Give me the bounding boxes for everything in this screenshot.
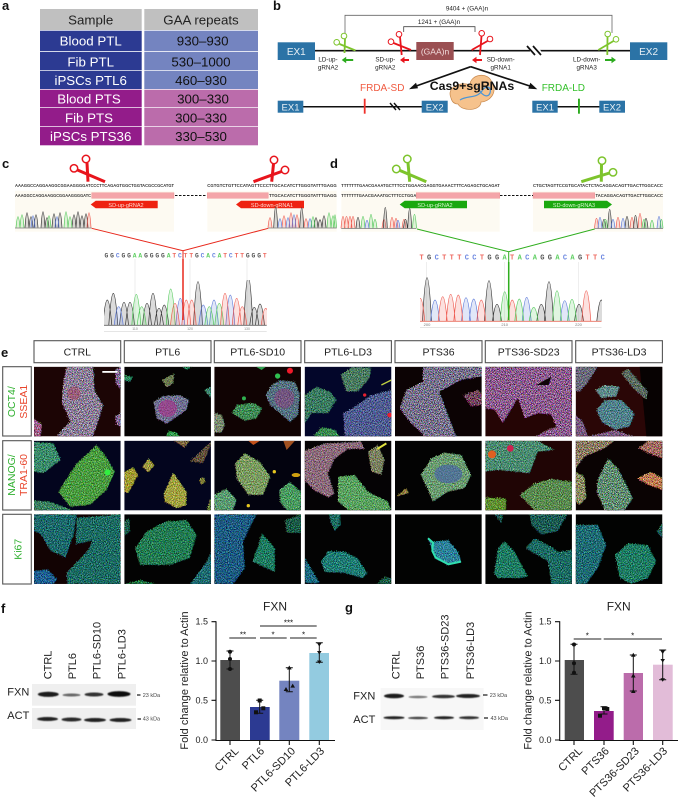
blot lane labels: CTRL: [391, 651, 403, 679]
right trace strip: [207, 183, 337, 232]
left trace strip: AAAGGCCAGGAAGGCGGAAGGGGATC: [15, 193, 91, 198]
exon 1 box: [278, 42, 315, 60]
FXN blot bands: [384, 694, 480, 698]
micrograph PTL6-SD10 NANOG: [214, 441, 301, 510]
column headers: CTRL: [64, 346, 91, 358]
exon 1 box: EX1: [287, 47, 306, 58]
x tick labels: PTS36-LD3: [621, 745, 670, 794]
panel letter d: d: [330, 156, 338, 171]
x tick labels: CTRL: [213, 745, 241, 774]
micrograph PTL6-LD3 Ki67: [305, 514, 391, 584]
row iPSCs PTS36: iPSCs PTS36: [50, 129, 131, 144]
Cas9+sgRNAs label: Cas9+sgRNAs: [430, 79, 514, 93]
left trace strip: TTTTTTTGAACGAAATGCTTTCCTGGAACGAGGTGAAACTTTCAGAGCTGCAGAT: [341, 183, 500, 188]
outer bracket 9404: 9404 + (GAA)n: [446, 6, 489, 12]
base calls: TGCTTTCCTGGATACAGGACAGTTC: [420, 254, 608, 262]
micrograph CTRL NANOG: [34, 441, 121, 510]
left trace strip: SD-up-gRNA2: [108, 203, 144, 209]
significance bars: [229, 618, 317, 640]
row iPSCs PTL6: [40, 71, 258, 89]
panel letter e: e: [1, 345, 8, 360]
panel e: immunofluorescence grid: [1, 341, 662, 584]
deletion dashed link: [500, 194, 533, 196]
blot lane labels: [43, 622, 129, 679]
gRNA label LD-up: gRNA2: [318, 64, 339, 72]
row label OCT4/SSEA1: OCT4/: [6, 386, 18, 417]
row Blood PTL: [40, 31, 258, 51]
micrograph PTL6-LD3 NANOG: [305, 441, 391, 510]
row label NANOG/TRA1-60: NANOG/: [6, 454, 18, 496]
FRDA-LD allele: EX2: [603, 102, 621, 113]
gRNA label SD-down: gRNA1: [491, 64, 511, 72]
blot labels: [353, 690, 376, 726]
inner bracket 1241: [404, 19, 475, 32]
junction trace: 110: [132, 327, 138, 331]
guide arrow SD-up: [400, 57, 409, 63]
significance bars: *: [586, 632, 589, 640]
inner bracket 1241: 1241 + (GAA)n: [418, 19, 461, 26]
size markers: [137, 693, 161, 722]
y tick labels: 1.0: [195, 656, 208, 666]
blot labels: ACT: [7, 710, 30, 722]
row Fib PTS: [40, 108, 258, 126]
blot labels: [7, 687, 30, 722]
scissors right green: [581, 157, 617, 182]
micrograph PTS36 NANOG: [395, 441, 482, 510]
right trace strip: SD-down-gRNA1: [251, 203, 293, 209]
y axis title: Fold change relative to Actin: [179, 611, 191, 750]
column headers: PTS36: [422, 346, 455, 358]
junction trace: [103, 252, 270, 332]
row label NANOG/TRA1-60: [3, 441, 31, 510]
column headers: PTL6-LD3: [324, 346, 372, 358]
left trace strip: SD-up-gRNA2: [417, 203, 453, 209]
size markers: 23 kDa: [490, 693, 508, 699]
micrograph PTS36 OCT4: [395, 367, 482, 436]
FRDA-SD allele: [278, 99, 448, 114]
panel letter g: g: [345, 600, 353, 615]
FRDA-LD allele: [532, 99, 625, 114]
y tick labels: [539, 617, 552, 745]
row Fib PTL: Fib PTL: [67, 55, 114, 70]
scissors: SD-up red: [388, 32, 411, 55]
scale bar: [102, 371, 117, 373]
micrograph PTS36-SD23 NANOG: [485, 441, 572, 510]
scissors right red: [254, 156, 289, 182]
left trace strip: AAAGGCCAGGAAGGCGGAAGGGGATCCCTTCAGAGTGGCTGGTACGCCGCATGT: [15, 183, 174, 188]
scissors left red: [70, 155, 105, 182]
right trace strip: SD-down-gRNA3: [553, 203, 595, 209]
row iPSCs PTS36: [40, 127, 258, 145]
blot labels: ACT: [353, 714, 376, 726]
significance bars: *: [302, 630, 305, 640]
panel f: PTL6 western blot and bar chart: [1, 600, 335, 794]
Cas9 protein blob: [450, 75, 494, 109]
size markers: 23 kDa: [143, 693, 161, 699]
ACT blot strip: [32, 708, 136, 729]
gRNA label LD-down: gRNA3: [577, 64, 597, 72]
y tick labels: 0.0: [195, 735, 208, 745]
row iPSCs PTL6: 460–930: [175, 73, 227, 88]
data points: [572, 642, 665, 718]
right trace strip: TTGCACATCTTGGGTATTTGAGG: [269, 193, 337, 198]
y tick labels: 0.0: [539, 735, 552, 745]
panel letter c: c: [2, 156, 9, 171]
ACT blot bands: [384, 716, 479, 719]
blot lane labels: [391, 614, 477, 679]
row Fib PTS: 300–330: [175, 110, 227, 125]
scissors: LD-down green: [598, 31, 619, 55]
table header row: [40, 9, 258, 30]
significance bars: ***: [284, 618, 293, 628]
y axis title: Fold change relative to Actin: [522, 611, 534, 750]
panel a: GAA repeats table: [2, 0, 258, 145]
red junction lines: [92, 228, 268, 320]
left trace strip: [15, 183, 174, 232]
right trace strip: CGTGTCTGTTCCATAGTTCCCTTGCACATCTTGGGTATTTGAGG: [207, 183, 337, 188]
panel letter f: f: [1, 601, 6, 616]
y tick labels: 0.5: [195, 695, 208, 705]
FRDA-SD allele: EX1: [282, 102, 299, 113]
FRDA-SD label: FRDA-SD: [360, 83, 404, 94]
size markers: 43 kDa: [143, 716, 161, 722]
junction trace: 200: [424, 322, 431, 327]
row iPSCs PTS36: 330–530: [175, 129, 227, 144]
junction trace: 220: [575, 322, 583, 327]
scissors: SD-down red: [472, 30, 493, 55]
exon 2 box: EX2: [639, 47, 658, 58]
micrograph PTS36-LD3 OCT4: [576, 367, 662, 436]
significance bars: [574, 632, 662, 640]
micrograph PTL6-SD10 OCT4: [214, 367, 301, 436]
scissors: LD-up green: [334, 33, 356, 53]
column headers: PTL6: [155, 346, 180, 358]
junction trace: [416, 254, 608, 328]
x tick labels: PTS36: [580, 745, 612, 778]
micrograph PTS36-LD3 Ki67: [576, 514, 662, 584]
genomic line: [315, 50, 630, 52]
table header row: Sample: [68, 12, 113, 28]
micrograph PTL6-SD10 Ki67: [214, 514, 301, 584]
row Blood PTL: Blood PTL: [60, 34, 122, 49]
outer bracket 9404: [345, 6, 612, 33]
row Blood PTS: Blood PTS: [57, 91, 121, 106]
gRNA label SD-down: SD-down-: [487, 56, 515, 64]
micrograph PTL6-LD3 OCT4: [305, 367, 392, 436]
FXN chart title: FXN: [607, 600, 631, 614]
x tick labels: PTL6-SD10: [249, 745, 298, 794]
blot labels: FXN: [353, 690, 375, 702]
FRDA-SD allele: EX2: [426, 102, 444, 113]
data points: [228, 643, 322, 714]
junction trace: 120: [187, 327, 193, 331]
scissors left green: [393, 155, 426, 182]
right trace strip: TACAGGACAGTTGACTTGGCACC: [596, 193, 663, 198]
blot lane labels: PTS36-LD3: [465, 622, 477, 679]
blot lane labels: PTS36: [415, 646, 427, 679]
y tick labels: 1.0: [539, 656, 552, 666]
column headers: PTS36-LD3: [592, 346, 647, 358]
error bars: [226, 643, 323, 713]
blot lane labels: PTL6-SD10: [92, 622, 104, 679]
right trace strip: [533, 183, 663, 232]
x tick labels: [213, 745, 327, 794]
bars: [220, 653, 329, 740]
right trace strip: CTGCTAGTTCCGTGCATACTCTACAGGACAGTTGACTTGGCACC: [533, 183, 663, 188]
base calls: GGCGGAAGGGGATCTTGCACATCTTGGGT: [104, 252, 268, 260]
micrograph PTS36 Ki67: [395, 514, 482, 584]
panel g: PTS36 western blot and bar chart: [345, 600, 678, 799]
x tick labels: PTL6: [240, 745, 267, 772]
FXN chart title: FXN: [263, 600, 287, 614]
axes and ticks: [555, 621, 678, 745]
exon 2 box: [630, 42, 667, 60]
panel d: Sanger trace for LD deletion: [330, 155, 663, 328]
GAA repeat box: (GAA)n: [421, 46, 449, 56]
size markers: 43 kDa: [490, 716, 509, 722]
significance bars: *: [631, 632, 634, 640]
blot lane labels: PTL6: [67, 653, 79, 679]
row label OCT4/SSEA1: [3, 367, 31, 436]
blot background: [381, 688, 484, 730]
significance bars: **: [240, 630, 246, 640]
x tick labels: [556, 745, 670, 799]
row Blood PTS: 300–330: [177, 91, 229, 106]
micrograph CTRL Ki67: [34, 514, 121, 584]
micrograph PTL6 Ki67: [124, 514, 211, 584]
bars: [565, 660, 673, 740]
blot labels: FXN: [7, 687, 29, 699]
error bars: [570, 644, 666, 714]
deletion dashed link: [175, 194, 207, 196]
x tick labels: CTRL: [556, 745, 585, 774]
branching arrows: [409, 67, 537, 89]
blot lane labels: CTRL: [43, 651, 55, 679]
y tick labels: [195, 617, 208, 745]
x tick labels: PTL6-LD3: [283, 745, 327, 789]
guide arrow SD-down: [472, 57, 482, 63]
row Blood PTS: [40, 90, 258, 107]
FRDA-LD label: FRDA-LD: [542, 83, 585, 94]
table header row: GAA repeats: [163, 12, 239, 28]
row Blood PTL: 930–930: [177, 34, 229, 49]
gRNA label SD-up: SD-up-: [375, 56, 395, 64]
guide arrow LD-up: [342, 57, 353, 63]
FXN blot strip: [32, 684, 136, 706]
column headers: PTS36-SD23: [498, 346, 560, 358]
y tick labels: 1.5: [195, 617, 208, 627]
row label Ki67: [3, 514, 31, 584]
row iPSCs PTL6: iPSCs PTL6: [54, 73, 127, 88]
left trace strip: [341, 183, 500, 232]
blot lane labels: PTS36-SD23: [440, 614, 452, 679]
column headers: PTL6-SD10: [230, 346, 285, 358]
panel b: deletion strategy schematic: [273, 0, 667, 114]
axes and ticks: [212, 621, 335, 745]
junction trace: 210: [501, 322, 509, 327]
junction trace: 130: [244, 327, 250, 331]
micrograph PTS36-LD3 NANOG: [576, 441, 662, 510]
micrograph PTL6 OCT4: [124, 367, 211, 436]
panel c: Sanger trace for SD deletion: [2, 155, 337, 332]
micrograph CTRL OCT4: [34, 367, 121, 436]
gRNA label LD-up: LD-up-: [318, 56, 338, 64]
y tick labels: 0.5: [539, 695, 552, 705]
left trace strip: TTTTTTTGAACGAAATGCTTTCCTGGA: [341, 193, 416, 198]
green junction lines: [417, 229, 595, 320]
row label OCT4/SSEA1: SSEA1: [18, 385, 30, 419]
micrograph PTS36-SD23 Ki67: [485, 514, 572, 584]
y tick labels: 1.5: [539, 617, 552, 627]
column headers: [34, 341, 662, 363]
line break mark: [527, 46, 541, 55]
x tick labels: PTS36-SD23: [588, 745, 642, 799]
gRNA label LD-down: LD-down-: [573, 56, 600, 64]
GAA repeat box: [416, 42, 454, 60]
size markers: [483, 693, 509, 722]
significance bars: *: [271, 630, 275, 640]
row Fib PTL: [40, 52, 258, 70]
guide arrow LD-down: [605, 57, 616, 63]
blot lane labels: PTL6-LD3: [116, 629, 128, 679]
row Fib PTL: 530–1000: [171, 55, 231, 70]
FRDA-LD allele: EX1: [536, 102, 554, 113]
gRNA label SD-up: gRNA2: [375, 64, 396, 72]
row label NANOG/TRA1-60: TRA1-60: [18, 454, 30, 496]
micrograph PTS36-SD23 OCT4: [485, 367, 572, 436]
micrograph PTL6 NANOG: [124, 441, 211, 510]
row Fib PTS: Fib PTS: [65, 110, 113, 125]
row label Ki67: Ki67: [12, 539, 24, 560]
